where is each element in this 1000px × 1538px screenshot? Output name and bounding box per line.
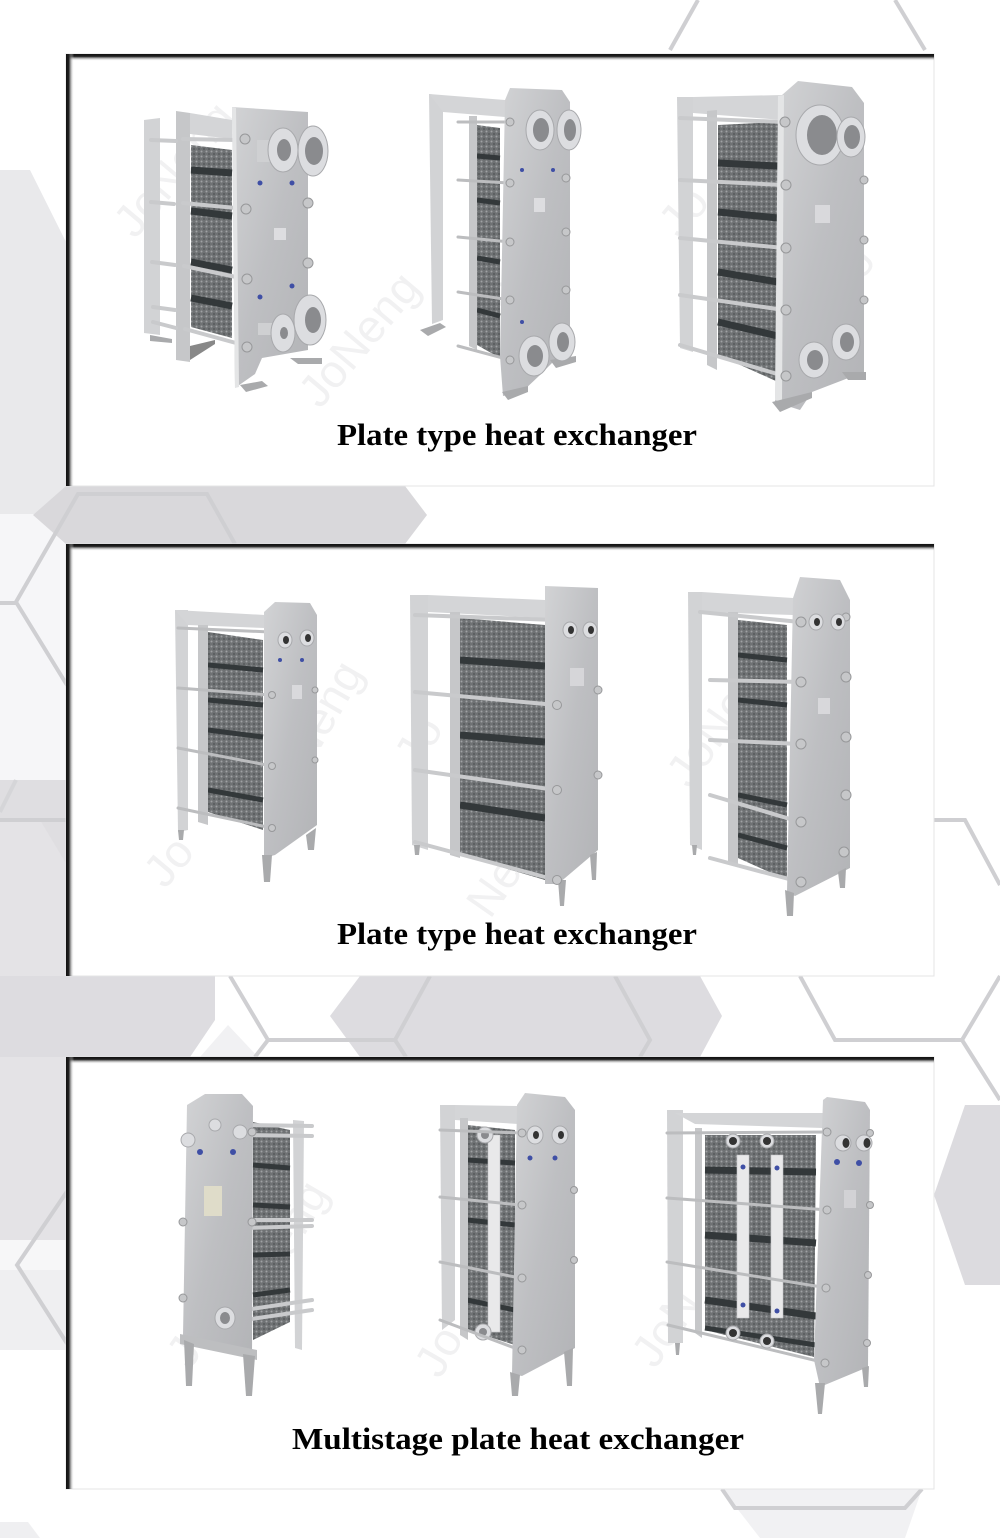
panel 3 watermarks: JoNeng <box>214 1172 338 1335</box>
title: panel 3: Multistage plate heat exchanger <box>292 1421 744 1456</box>
title: panel 2: Plate type heat exchanger <box>337 916 697 951</box>
exchanger 3 <box>677 81 868 412</box>
panel 2 watermarks: Jo <box>384 707 453 775</box>
exchanger 2 <box>420 88 581 400</box>
exchanger 5 <box>410 586 602 906</box>
panel 1 watermarks: Neng <box>768 229 878 346</box>
exchanger 4 <box>175 602 318 882</box>
exchanger 9 <box>667 1097 874 1414</box>
exchanger 8 <box>440 1093 578 1396</box>
panel 1 watermarks: JoNeng <box>288 262 430 416</box>
panel 2 watermarks <box>133 652 760 926</box>
panel 2 watermarks: JoNeng <box>249 652 373 815</box>
panel 3 watermarks: JoN <box>621 1279 710 1376</box>
panel 1 watermarks: Jo <box>458 266 529 336</box>
panel 2 watermarks: JoNe <box>656 678 760 796</box>
title: panel 1: Plate type heat exchanger <box>337 417 697 452</box>
exchanger 7 <box>179 1094 312 1396</box>
panel 1 watermarks: JoNeng <box>103 92 245 246</box>
panel 3 watermarks: Jong <box>156 1264 255 1376</box>
panel 1 frame <box>66 54 934 486</box>
panel 1: plate type heat exchanger <box>66 54 934 486</box>
panel 3: multistage plate heat exchanger <box>66 1057 934 1489</box>
panel 3 watermarks <box>156 1168 710 1385</box>
panel 2 frame <box>66 544 934 976</box>
panel 3 watermarks: Jo <box>404 1317 473 1385</box>
exchanger 6 <box>688 577 851 916</box>
panel 1 watermarks: Jo <box>648 176 719 246</box>
panel 2: plate type heat exchanger <box>66 544 934 976</box>
panel 2 watermarks: Neng <box>456 806 561 926</box>
panel 1 watermarks <box>103 92 878 416</box>
exchanger 1 <box>144 107 328 392</box>
panel 3 frame <box>66 1057 934 1489</box>
panel 2 watermarks: Jo <box>133 826 204 896</box>
panel 3 watermarks: Ne <box>514 1168 588 1245</box>
